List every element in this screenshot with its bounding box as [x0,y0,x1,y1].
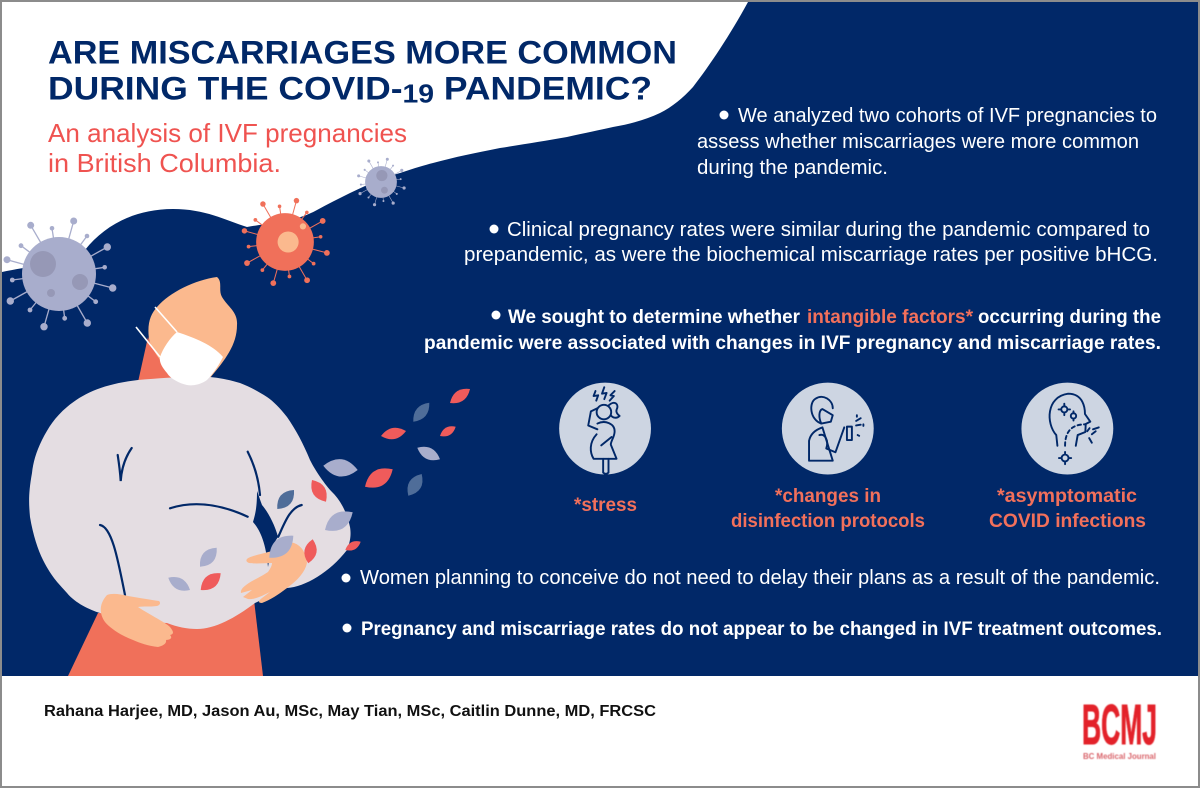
label: disinfection protocols: *changes in [775,486,881,507]
virus: large lavender [4,218,116,330]
sweater body [29,377,351,629]
text block: intangible factors: occurring during the [978,306,1161,328]
icon: head with viruses and cough [1021,383,1113,474]
subtitle: in British Columbia. [48,148,281,178]
text block: cohorts: assess whether miscarriages were more common [697,131,1139,153]
text block: clinical pregnancy rates: prepandemic, as were the biochemical miscarriage rates per positive bHCG. [464,244,1158,266]
text block: pregnancy and miscarriage rates: Pregnancy and miscarriage rates do not appear to be changed in IVF treatment outcomes. [361,618,1162,640]
text block: cohorts: during the pandemic. [697,157,888,179]
label: asymptomatic infections: *asymptomatic [997,486,1137,507]
title: DURING THE COVID- [48,70,373,106]
skirt [68,600,263,676]
neck [138,337,195,393]
text block: intangible factors: We sought to determine whether [508,306,800,328]
text block: intangible factors: intangible factors* [807,306,973,328]
falling leaves [168,389,470,591]
left hand [101,594,173,647]
face mask [160,332,223,385]
gap between arm and torso [253,491,278,567]
text block: cohorts: We analyzed two cohorts of IVF pregnancies to [738,105,1157,127]
text block: clinical pregnancy rates [464,219,1158,266]
logo: BCMJ [1082,693,1157,761]
virus: orange [242,198,330,286]
subtitle [48,118,407,178]
mask straps [136,307,177,357]
title: ARE MISCARRIAGES MORE COMMON [48,34,677,70]
label: asymptomatic infections [989,486,1146,532]
subtitle: An analysis of IVF pregnancies [48,118,407,148]
text block: cohorts [697,105,1157,179]
text block: women planning to conceive: Women planning to conceive do not need to delay their plans as a result of the pandemic. [360,567,1160,589]
label: disinfection protocols: disinfection protocols [731,511,925,532]
head [148,277,237,385]
logo: BCMJ: BC Medical Journal [1083,751,1156,761]
label: disinfection protocols [731,486,925,532]
text block: intangible factors [424,306,1161,354]
icon: stressed pregnant woman [559,383,651,474]
text block: clinical pregnancy rates: Clinical pregnancy rates were similar during the pandemic compared to [507,219,1150,241]
text block: intangible factors: pandemic were associated with changes in IVF pregnancy and miscarriage rates. [424,332,1161,354]
icon: person spraying disinfectant [782,383,874,474]
label: stress: *stress [574,495,637,516]
title [48,34,677,108]
virus: small lavender [357,158,406,206]
authors: Rahana Harjee, MD, Jason Au, MSc, May Tian, MSc, Caitlin Dunne, MD, FRCSC [44,703,656,720]
illustration: masked woman holding belly [29,277,351,676]
title: 19 [403,78,434,108]
right hand [241,542,307,603]
label: asymptomatic infections: COVID infections [989,511,1146,532]
title: PANDEMIC? [434,70,652,106]
sweater fold lines [100,448,302,595]
